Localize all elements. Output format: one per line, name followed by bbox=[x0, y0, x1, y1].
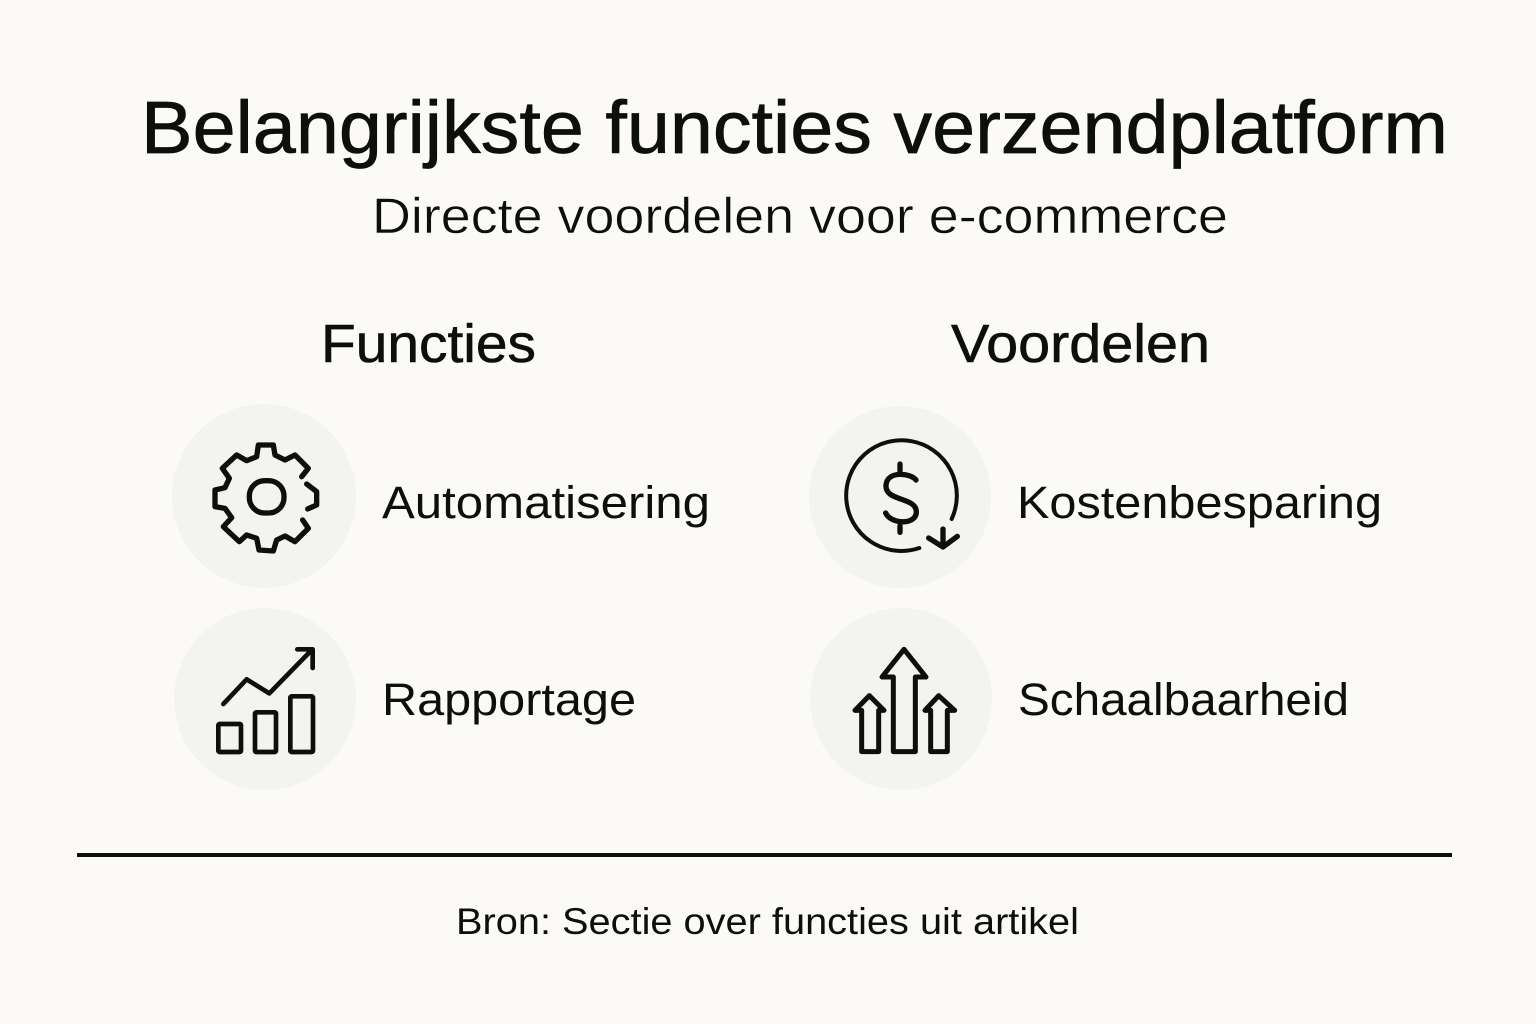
icon: dollar with down arrow bbox=[809, 406, 991, 588]
label: Automatisering: Automatisering bbox=[382, 477, 710, 528]
title: Belangrijkste functies verzendplatform bbox=[141, 86, 1448, 169]
feature: Rapportage bbox=[174, 608, 636, 790]
icon: bar chart with rising arrow bbox=[174, 608, 356, 790]
label: Rapportage: Rapportage bbox=[382, 674, 636, 725]
column heading: Voordelen: Voordelen bbox=[951, 314, 1210, 374]
benefit: Schaalbaarheid bbox=[810, 608, 1349, 790]
subtitle: Directe voordelen voor e-commerce bbox=[372, 188, 1228, 244]
benefit: Kostenbesparing bbox=[809, 406, 1382, 588]
icon: three up arrows bbox=[810, 608, 992, 790]
feature: Automatisering bbox=[172, 404, 710, 588]
label: Kostenbesparing: Kostenbesparing bbox=[1017, 477, 1382, 528]
icon: gear bbox=[172, 404, 356, 588]
label: Schaalbaarheid: Schaalbaarheid bbox=[1018, 674, 1349, 725]
column heading: Functies: Functies bbox=[321, 314, 536, 374]
source note: Bron: Sectie over functies uit artikel bbox=[456, 901, 1079, 942]
